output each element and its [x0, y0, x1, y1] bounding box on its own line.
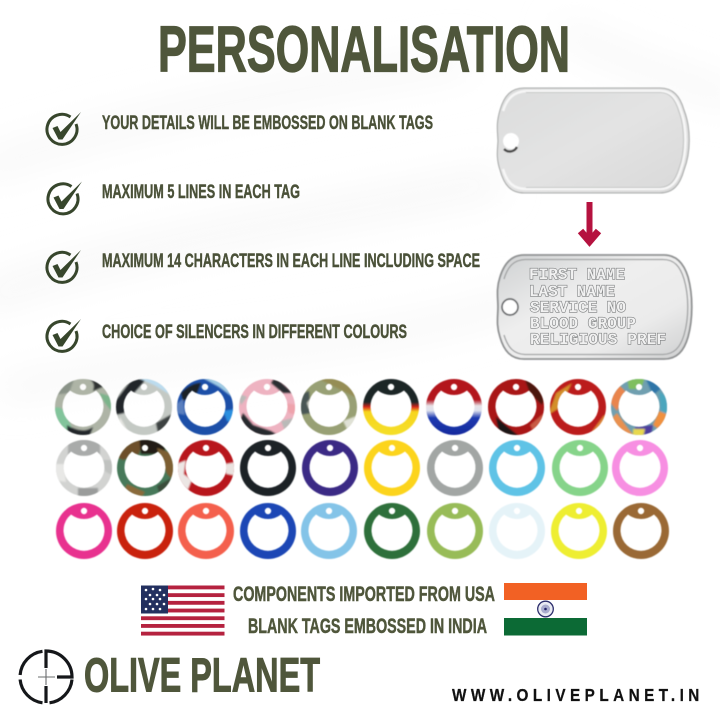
- silencer row 3: [56, 503, 669, 559]
- silencer: black red yellow: [361, 377, 421, 437]
- silencer: red orange swirl: [548, 377, 608, 437]
- silencer: pink camo: [237, 377, 297, 437]
- silencer row 2: [54, 438, 668, 498]
- embossed text: SERVICE NO: [530, 299, 626, 317]
- silencer: ice white: [489, 503, 545, 559]
- feature list: [47, 112, 480, 351]
- silencer: red black swirl: [486, 377, 546, 437]
- silencer: red white: [176, 438, 236, 498]
- embossed dog tag: [498, 255, 692, 359]
- origin text: USA: COMPONENTS IMPORTED FROM USA: [233, 583, 495, 606]
- website: WWW.OLIVEPLANET.IN: [452, 685, 699, 705]
- silencer: coral: [178, 503, 234, 559]
- silencer: magenta: [56, 503, 112, 559]
- embossed text: LAST NAME: [529, 283, 615, 301]
- silencer: white grey black camo: [114, 377, 174, 437]
- bullet text 3: MAXIMUM 14 CHARACTERS IN EACH LINE INCLUDING SPACE: [102, 250, 480, 272]
- silencer: dark green: [364, 503, 420, 559]
- silencer: black: [240, 440, 296, 496]
- origin text: India: BLANK TAGS EMBOSSED IN INDIA: [248, 615, 487, 638]
- embossed text: RELIGIOUS PREF: [530, 331, 666, 349]
- silencer: blue black camo: [175, 377, 235, 437]
- silencer: red white blue: [424, 377, 484, 437]
- flag: USA: [141, 586, 224, 636]
- icon: check 3: [47, 250, 81, 282]
- brand name: OLIVE PLANET: [84, 650, 320, 702]
- silencer: purple: [302, 440, 358, 496]
- background texture: [0, 30, 720, 390]
- logo: crosshair: [20, 651, 72, 703]
- silencer: grey: [427, 440, 483, 496]
- silencer: rainbow swirl: [609, 377, 669, 437]
- silencer: blue: [240, 503, 296, 559]
- silencer: pink: [612, 440, 668, 496]
- icon: check 4: [47, 319, 81, 351]
- icon: check 1: [47, 112, 81, 144]
- silencer row 1: [53, 377, 669, 437]
- icon: check 2: [48, 182, 82, 214]
- bullet text 2: MAXIMUM 5 LINES IN EACH TAG: [102, 181, 300, 203]
- silencer: red: [117, 503, 173, 559]
- arrow: blank to embossed: [580, 202, 598, 242]
- silencer: white grey: [54, 438, 114, 498]
- silencer: lime green: [427, 503, 483, 559]
- bullet text 4: CHOICE OF SILENCERS IN DIFFERENT COLOURS: [102, 321, 407, 343]
- embossed text: [529, 266, 666, 349]
- silencer: grey green camo: [53, 377, 113, 437]
- embossed text: FIRST NAME: [529, 266, 625, 284]
- silencer: olive camo: [299, 377, 359, 437]
- silencer: light blue: [301, 503, 357, 559]
- silencer: green brown camo: [115, 438, 175, 498]
- silencer: green: [552, 440, 608, 496]
- silencer colour swatches: [53, 377, 669, 559]
- silencer: yellow: [364, 440, 420, 496]
- blank dog tag: [497, 88, 689, 193]
- silencer: brown: [613, 503, 669, 559]
- embossed text: BLOOD GROUP: [530, 315, 636, 333]
- bullet text 1: YOUR DETAILS WILL BE EMBOSSED ON BLANK TAGS: [102, 112, 433, 134]
- silencer: sky blue: [489, 440, 545, 496]
- silencer: lemon yellow: [551, 503, 607, 559]
- flag: India: [504, 583, 587, 636]
